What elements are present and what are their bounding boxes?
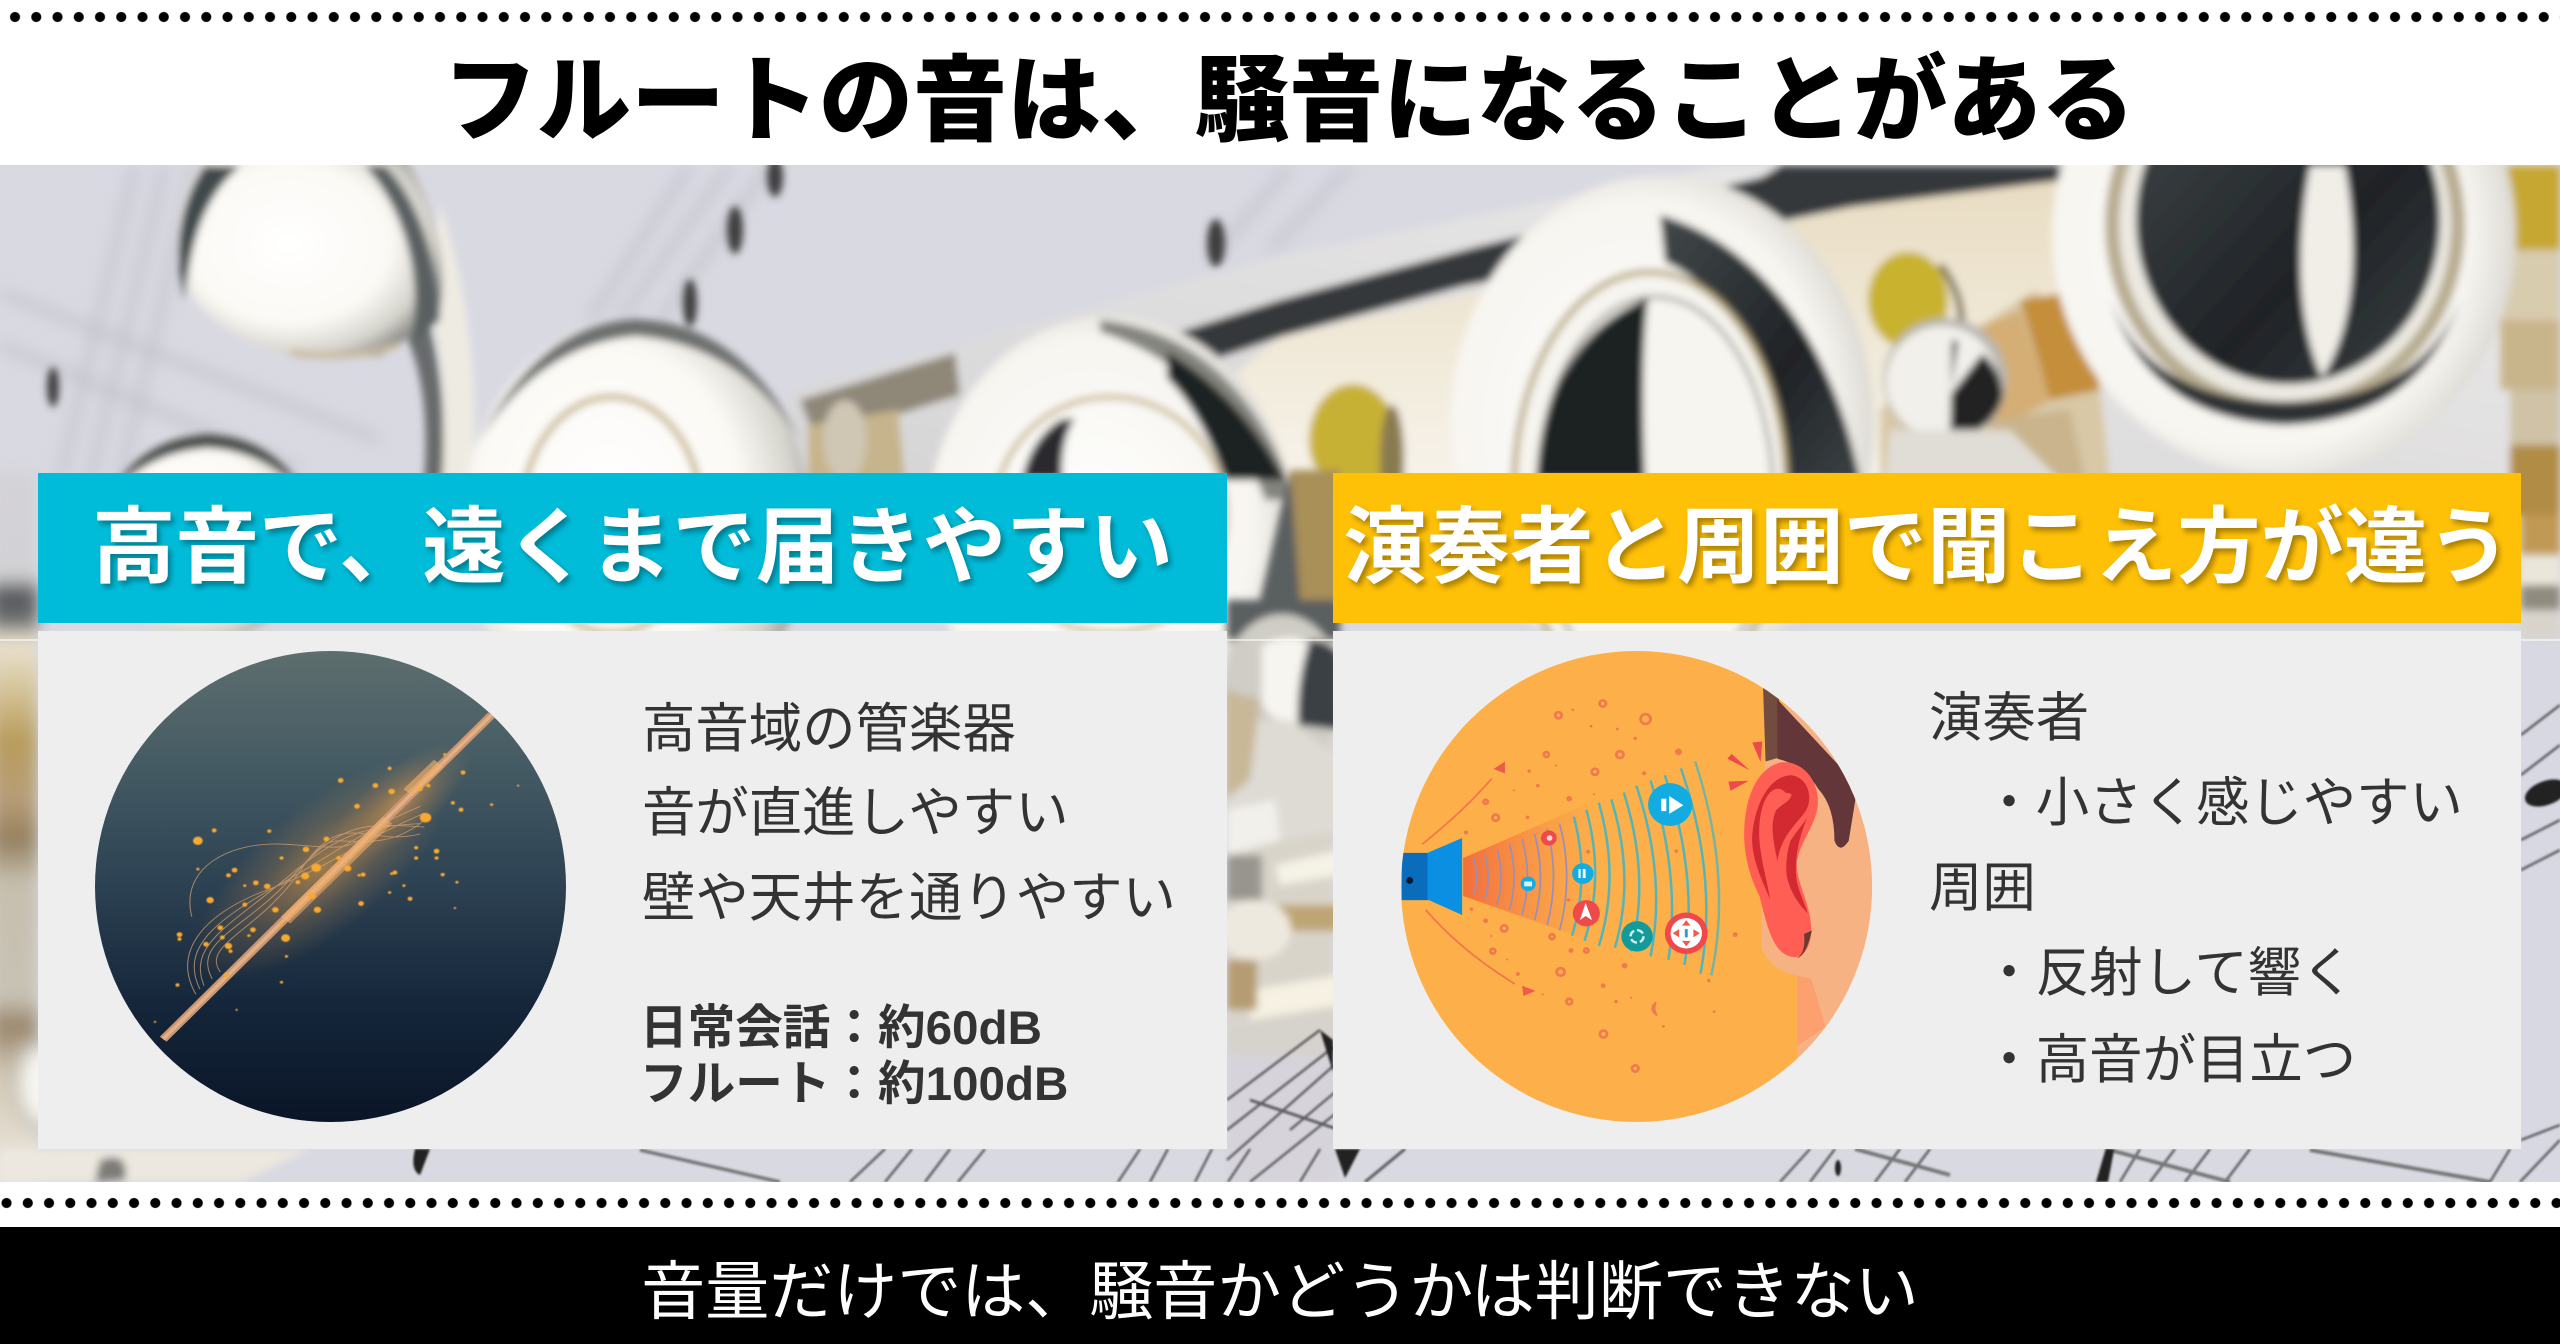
footer message: 音量だけでは、騒音かどうかは判断できない — [641, 1256, 1919, 1328]
title: フルートの音は、騒音になることがある — [443, 48, 2135, 153]
sound icons — [1521, 783, 1708, 954]
center gap — [1227, 623, 1333, 1043]
key B — [462, 319, 810, 731]
line 2: 音が直進しやすい — [642, 784, 1069, 843]
key F: top-right ring key — [2052, 0, 2516, 475]
impact marks — [1727, 754, 1750, 770]
panel: right body — [1333, 631, 2521, 1149]
ear — [1744, 762, 1818, 957]
face and neck — [1761, 704, 1872, 1059]
surroundings detail 2: ・高音が目立つ — [1982, 1031, 2356, 1090]
heading: left — [38, 473, 1227, 623]
sound beam — [1463, 810, 1576, 936]
heading: right: 演奏者と周囲で聞こえ方が違う — [1343, 501, 2511, 594]
gold linkage — [1880, 290, 2110, 480]
far right gold section — [2500, 166, 2560, 286]
background photo: silver flute on sheet music — [0, 165, 2560, 1182]
performer detail: ・小さく感じやすい — [1982, 774, 2463, 833]
text: left bullet lines — [640, 700, 1176, 1111]
text: right listening differences — [1929, 689, 2463, 1090]
illustration: speaker sound waves reaching an ear — [1401, 651, 1872, 1122]
line 1: 高音域の管楽器 — [642, 700, 1016, 759]
speaker — [1402, 853, 1428, 900]
arrows — [1422, 779, 1515, 984]
key D: large ring key — [1450, 175, 1874, 675]
illustration: glowing flute with music notes — [95, 651, 566, 1122]
flute tube — [790, 166, 2560, 480]
surroundings: 周囲 — [1929, 859, 2036, 918]
yellow pad — [1868, 252, 1948, 348]
small specks — [1484, 700, 1651, 1072]
surroundings detail 1: ・反射して響く — [1982, 944, 2355, 1003]
decibel comparison: フルート：約100dB — [640, 1058, 1068, 1111]
key C — [928, 316, 1292, 738]
left strip — [0, 470, 38, 1182]
heading: right — [1333, 473, 2521, 623]
decibel comparison — [640, 1002, 1068, 1111]
sharp staff lines — [640, 705, 2560, 1182]
heading: left: 高音で、遠くまで届きやすい — [92, 501, 1173, 594]
thin line across gap — [0, 639, 2560, 641]
key A: teardrop — [425, 205, 475, 480]
key E small — [1883, 318, 2007, 442]
panel: left body — [38, 631, 1227, 1149]
small key lower-left — [105, 432, 311, 640]
line 3: 壁や天井を通りやすい — [642, 869, 1176, 928]
footer bar — [0, 1227, 2560, 1344]
hair — [1763, 687, 1779, 761]
performer: 演奏者 — [1929, 689, 2089, 748]
bottom strip left — [0, 1149, 310, 1182]
decibel comparison: 日常会話：約60dB — [640, 1002, 1042, 1055]
